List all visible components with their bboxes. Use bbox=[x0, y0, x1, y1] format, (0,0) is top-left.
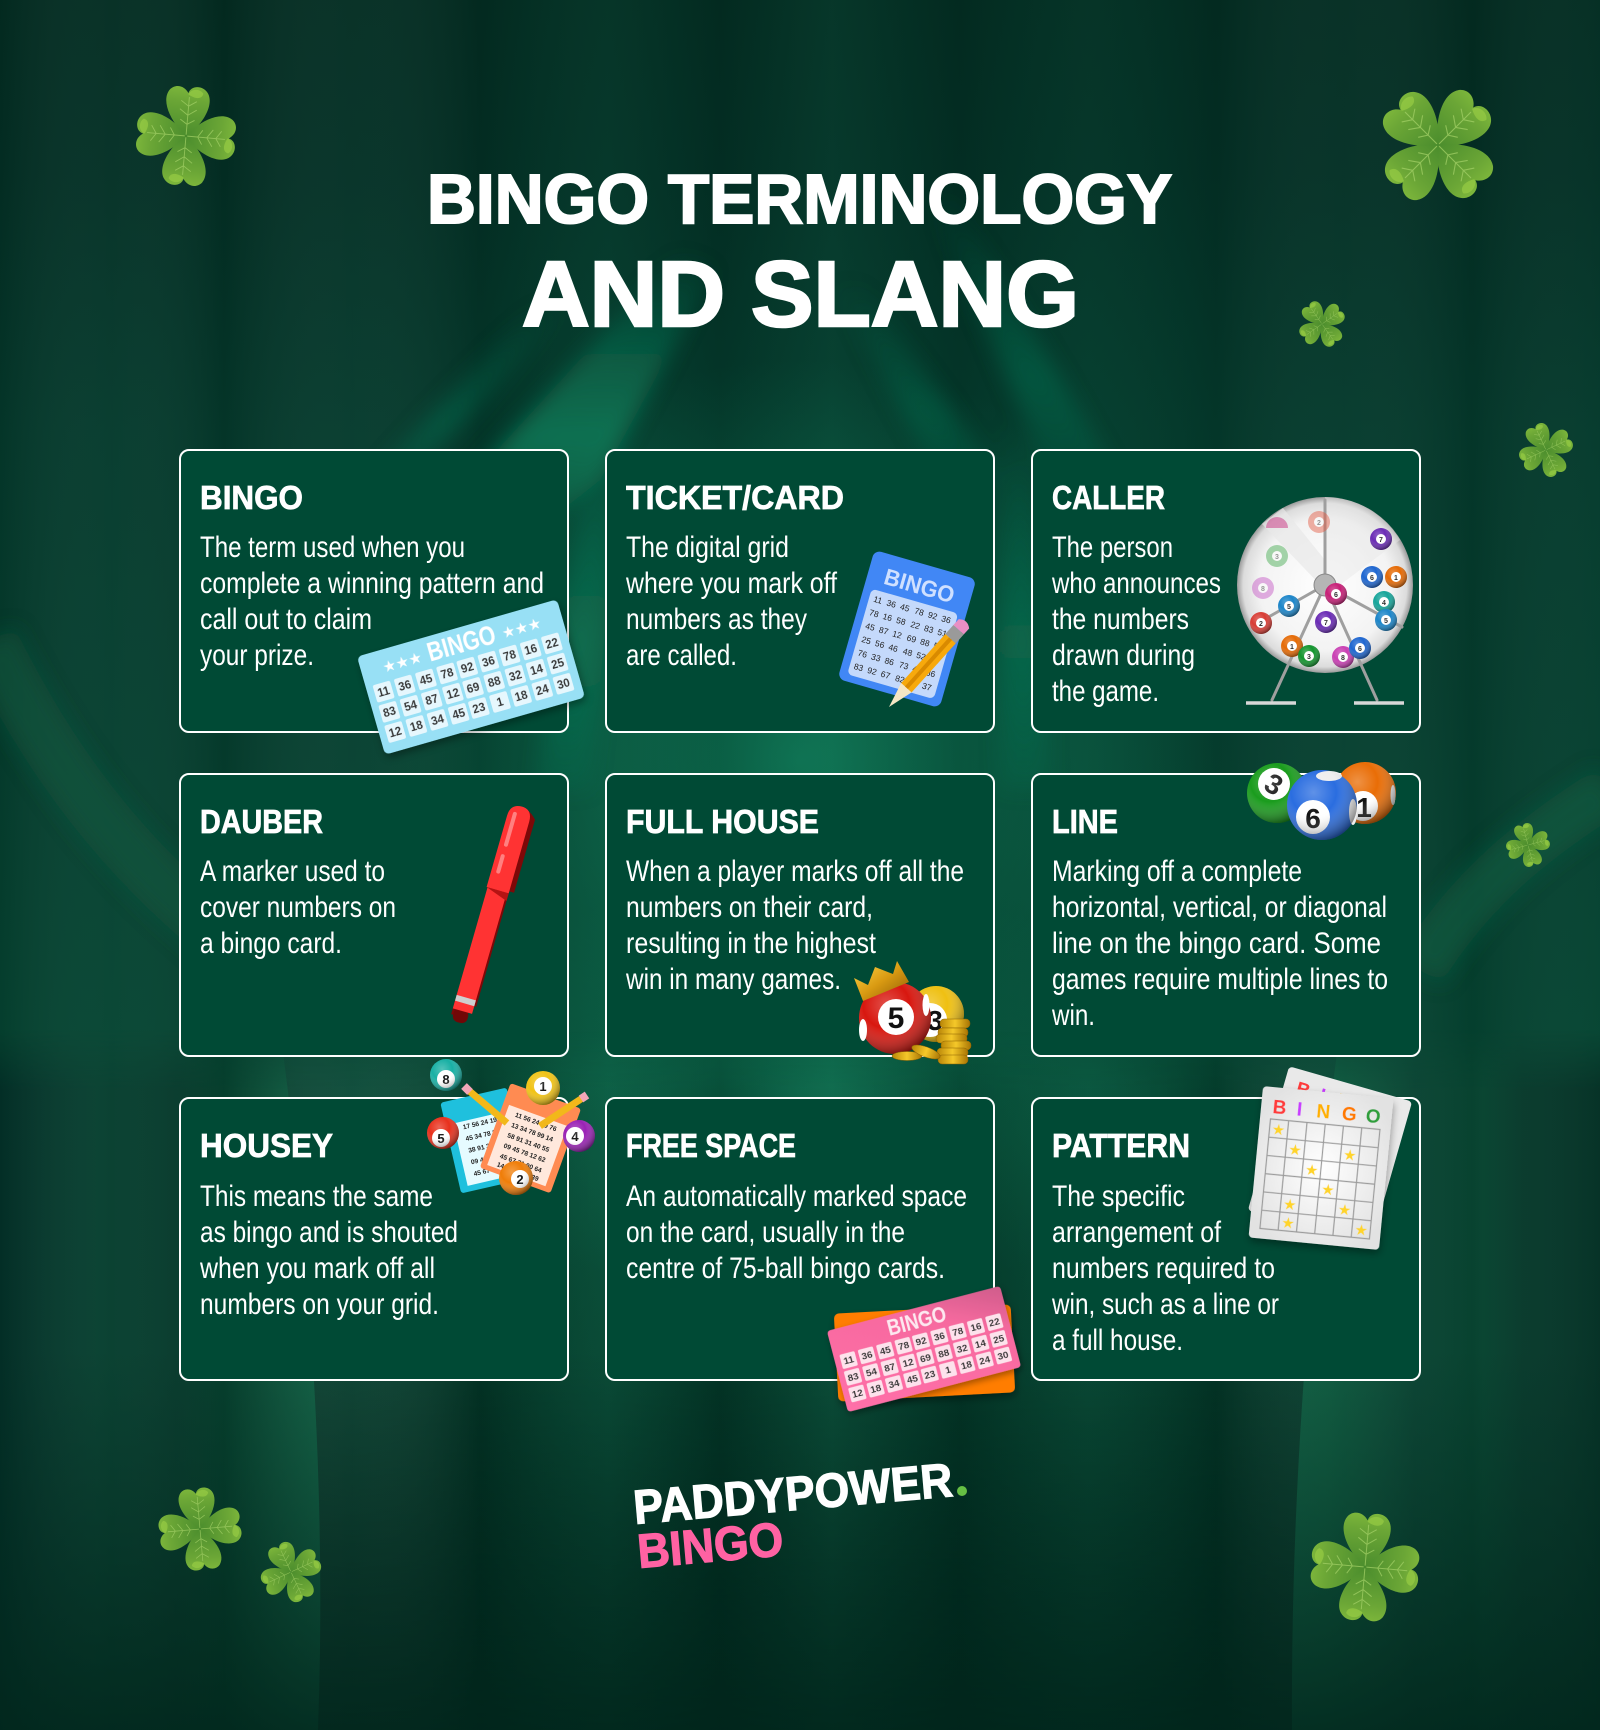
icon: cards, pencils and balls: 45 34 78 36 bbox=[465, 1128, 501, 1143]
icon: blue bingo ticket: 36 bbox=[481, 655, 497, 670]
text: pattern definition: arrangement of bbox=[1052, 1216, 1222, 1249]
icon: bingo ball cage: 7 bbox=[1324, 620, 1328, 627]
icon: pink and orange tickets bbox=[827, 1286, 1021, 1412]
text: line definition bbox=[1051, 855, 1388, 1032]
icon: bingo ball cage: 5 bbox=[1384, 618, 1388, 625]
icon: blue bingo ticket: 78 bbox=[440, 667, 456, 682]
icon: pink and orange tickets: 18 bbox=[869, 1383, 883, 1396]
icon: bingo pattern sheets: N bbox=[1315, 1101, 1331, 1124]
icon: blue bingo card with pencil: 11 bbox=[872, 594, 884, 606]
icon: bingo pattern sheets: ★ bbox=[1354, 1221, 1369, 1240]
icon: pink and orange tickets: 78 bbox=[897, 1340, 911, 1353]
icon: blue bingo card with pencil: 57 bbox=[933, 640, 945, 653]
icon: blue bingo card with pencil: BINGO bbox=[881, 563, 958, 608]
text: caller definition: The person bbox=[1052, 531, 1173, 564]
text: free space definition: centre of 75-ball bingo cards. bbox=[626, 1252, 945, 1285]
icon: blue bingo ticket: BINGO bbox=[424, 619, 499, 667]
icon: pink and orange tickets: 45 bbox=[879, 1345, 893, 1358]
icon: blue bingo card with pencil: 78 bbox=[913, 606, 925, 618]
icon: blue bingo card with pencil: 45 bbox=[864, 621, 876, 633]
text: caller definition bbox=[1051, 531, 1221, 708]
icon: blue bingo ticket: 87 bbox=[424, 693, 440, 708]
text: caller definition: drawn during bbox=[1052, 639, 1195, 672]
icon: bingo pattern sheets: ★ bbox=[1271, 1120, 1286, 1139]
icon: cards, pencils and balls bbox=[427, 1059, 595, 1195]
heading: housey: HOUSEY bbox=[200, 1127, 333, 1164]
text: pattern definition: The specific bbox=[1052, 1180, 1185, 1213]
icon: blue bingo ticket: 54 bbox=[403, 699, 419, 714]
icon: bingo pattern sheets: G bbox=[1341, 1104, 1358, 1126]
icon: blue bingo card with pencil: 73 bbox=[898, 659, 910, 672]
icon: cards, pencils and balls: 45 67 71 90 bbox=[473, 1163, 509, 1178]
icon: blue bingo card with pencil: 87 bbox=[878, 625, 890, 637]
icon: blue bingo card with pencil: 37 bbox=[921, 681, 933, 693]
text: bingo definition: your prize. bbox=[200, 639, 314, 672]
icon: crowned bingo balls and coins: 3 bbox=[927, 1005, 943, 1036]
icon: blue bingo card with pencil: 12 bbox=[891, 628, 903, 641]
heading: caller: CALLER bbox=[1052, 479, 1165, 516]
icon: blue bingo card with pencil: 36 bbox=[885, 598, 898, 610]
icon: bingo pattern sheets: B bbox=[1272, 1097, 1287, 1119]
icon: blue bingo ticket: 18 bbox=[514, 689, 530, 704]
icon: three bingo balls: 1 bbox=[1356, 792, 1372, 823]
icon: blue bingo ticket: 36 bbox=[397, 679, 413, 694]
icon: blue bingo ticket: 14 bbox=[529, 663, 545, 678]
text: full house definition: resulting in the highest bbox=[626, 927, 877, 960]
icon: crowned bingo balls and coins bbox=[854, 961, 971, 1064]
icon: blue bingo ticket: 78 bbox=[502, 649, 518, 664]
heading: line: LINE bbox=[1052, 803, 1118, 840]
icon: pink and orange tickets: BINGO bbox=[884, 1301, 949, 1341]
text: line definition: games require multiple lines to bbox=[1052, 963, 1388, 996]
icon: pink and orange tickets: 34 bbox=[888, 1378, 901, 1391]
icon: blue bingo ticket: 12 bbox=[388, 725, 403, 741]
text: line definition: Marking off a complete bbox=[1052, 855, 1302, 888]
clover small mid right bbox=[1501, 818, 1555, 872]
icon: pink and orange tickets: 12 bbox=[851, 1388, 864, 1401]
icon: blue bingo ticket: 45 bbox=[451, 707, 467, 722]
text: dauber definition bbox=[200, 855, 396, 960]
text: full house definition: numbers on their card, bbox=[626, 891, 873, 924]
icon: cards, pencils and balls: 38 91 31 40 bbox=[468, 1140, 504, 1155]
icon: bingo ball cage: 2 bbox=[1317, 520, 1321, 527]
text: housey definition bbox=[199, 1180, 458, 1321]
text: ticket definition bbox=[625, 531, 838, 672]
clover small upper right bbox=[1296, 298, 1348, 350]
icon: blue bingo card with pencil: 41 bbox=[911, 663, 923, 676]
icon: pink and orange tickets: 23 bbox=[923, 1369, 937, 1382]
text: caller definition: the game. bbox=[1052, 675, 1159, 708]
icon: pink and orange tickets: 83 bbox=[847, 1371, 861, 1384]
text: pattern definition: win, such as a line or bbox=[1051, 1288, 1279, 1321]
icon: bingo pattern sheets: ★ bbox=[1288, 1140, 1303, 1160]
icon: pink and orange tickets: 54 bbox=[865, 1366, 879, 1379]
icon: pink and orange tickets: 16 bbox=[970, 1321, 984, 1334]
text: dauber definition: a bingo card. bbox=[200, 927, 342, 960]
clover bottom left small bbox=[255, 1536, 327, 1608]
heading: pattern: PATTERN bbox=[1052, 1127, 1190, 1164]
icon: blue bingo ticket: 16 bbox=[523, 643, 539, 658]
icon: blue bingo card with pencil: 58 bbox=[895, 615, 907, 627]
icon: cards, pencils and balls: 2 bbox=[516, 1172, 524, 1187]
icon: blue bingo card with pencil: 16 bbox=[882, 611, 894, 623]
icon: cards, pencils and balls: 11 56 24 19 76 bbox=[514, 1112, 558, 1133]
icon: blue bingo card with pencil: 46 bbox=[887, 642, 899, 654]
icon: pink and orange tickets: 30 bbox=[997, 1350, 1010, 1363]
icon: three bingo balls bbox=[1247, 762, 1396, 840]
text: housey definition: when you mark off all bbox=[199, 1252, 435, 1285]
icon: blue bingo ticket: 69 bbox=[466, 681, 481, 696]
icon: blue bingo ticket: 83 bbox=[382, 705, 398, 720]
icon: bingo pattern sheets: ★ bbox=[1342, 1146, 1357, 1165]
clover top right bbox=[1383, 90, 1493, 200]
logo: Paddy Power Bingo: PADDYPOWER bbox=[631, 1454, 955, 1535]
icon: bingo ball cage: 1 bbox=[1290, 644, 1294, 651]
icon: cards, pencils and balls: 09 45 78 12 62 bbox=[502, 1143, 547, 1164]
icon: pink and orange tickets: 22 bbox=[988, 1316, 1001, 1330]
title: AND SLANG bbox=[522, 242, 1079, 346]
icon: pink and orange tickets: 36 bbox=[933, 1331, 947, 1344]
text: dauber definition: A marker used to bbox=[200, 855, 385, 888]
text: full house definition: When a player marks off all the bbox=[626, 855, 964, 888]
text: ticket definition: numbers as they bbox=[626, 603, 807, 636]
icon: cards, pencils and balls: 5 bbox=[437, 1131, 445, 1146]
icon: blue bingo ticket: 32 bbox=[508, 669, 523, 684]
icon: blue bingo ticket: 18 bbox=[409, 719, 425, 734]
heading: ticket/card: TICKET/CARD bbox=[626, 479, 844, 516]
icon: blue bingo card with pencil: 78 bbox=[868, 607, 880, 619]
icon: bingo ball cage: 6 bbox=[1358, 646, 1362, 653]
icon: pink and orange tickets: 14 bbox=[974, 1338, 988, 1351]
text: dauber definition: cover numbers on bbox=[200, 891, 396, 924]
text: line definition: line on the bingo card. Some bbox=[1052, 927, 1381, 960]
icon: pink and orange tickets: 45 bbox=[906, 1373, 920, 1387]
icon: pink and orange tickets: 78 bbox=[951, 1326, 965, 1339]
panel: line bbox=[1032, 762, 1420, 1056]
icon: blue bingo ticket: 11 bbox=[376, 685, 392, 700]
icon: blue bingo ticket: 1 bbox=[496, 696, 506, 710]
icon: blue bingo card with pencil: 92 bbox=[866, 665, 878, 677]
icon: blue bingo card with pencil: 83 bbox=[923, 623, 935, 635]
icon: pink and orange tickets: 12 bbox=[901, 1357, 915, 1370]
icon: bingo ball cage: 3 bbox=[1307, 654, 1311, 661]
icon: blue bingo card with pencil: 51 bbox=[936, 627, 948, 639]
icon: blue bingo card with pencil: 33 bbox=[929, 654, 941, 666]
icon: blue bingo card with pencil: 45 bbox=[899, 601, 911, 614]
panel: dauber bbox=[180, 774, 568, 1056]
icon: pink and orange tickets: 18 bbox=[960, 1359, 974, 1372]
icon: bingo ball cage: 4 bbox=[1382, 600, 1386, 607]
text: caller definition: the numbers bbox=[1052, 603, 1189, 636]
panel: ticket/card bbox=[606, 450, 994, 732]
text: ticket definition: are called. bbox=[626, 639, 737, 672]
text: line definition: win. bbox=[1051, 999, 1095, 1032]
icon: blue bingo card with pencil: 83 bbox=[853, 661, 865, 673]
icon: blue bingo card with pencil: 48 bbox=[902, 646, 914, 658]
panel: free space bbox=[606, 1098, 1021, 1412]
text: pattern definition: numbers required to bbox=[1052, 1252, 1275, 1285]
icon: cards, pencils and balls: 13 34 78 99 14 bbox=[510, 1122, 554, 1144]
panel: full house bbox=[606, 774, 994, 1064]
text: pattern definition: a full house. bbox=[1052, 1324, 1183, 1357]
icon: bingo pattern sheets: O bbox=[1365, 1106, 1381, 1128]
icon: red marker pen bbox=[449, 803, 537, 1027]
icon: bingo pattern sheets: ★ bbox=[1320, 1180, 1336, 1199]
text: free space definition: on the card, usually in the bbox=[626, 1216, 905, 1249]
icon: blue bingo ticket bbox=[357, 599, 585, 755]
icon: bingo pattern sheets: I bbox=[1317, 1085, 1328, 1107]
panel: bingo bbox=[180, 450, 585, 755]
icon: blue bingo card with pencil: 92 bbox=[927, 609, 939, 622]
icon: bingo ball cage: 6 bbox=[1334, 592, 1338, 599]
icon: cards, pencils and balls: 09 45 78 12 bbox=[470, 1152, 506, 1166]
title: BINGO TERMINOLOGY bbox=[427, 160, 1172, 238]
icon: blue bingo card with pencil: 33 bbox=[870, 651, 882, 664]
icon: cards, pencils and balls: 14 32 48 17 39 bbox=[496, 1161, 540, 1183]
icon: crowned bingo balls and coins: 5 bbox=[888, 1002, 904, 1035]
text: housey definition: This means the same bbox=[200, 1180, 433, 1213]
icon: bingo pattern sheets: ★ bbox=[1337, 1200, 1352, 1220]
clover bottom left large bbox=[146, 1475, 254, 1583]
icon: blue bingo card with pencil: 69 bbox=[906, 633, 918, 645]
icon: blue bingo ticket: ★★★ bbox=[500, 614, 543, 642]
icon: blue bingo ticket: ★★★ bbox=[380, 648, 424, 677]
clover small right bbox=[1514, 418, 1578, 482]
icon: pink and orange tickets: 69 bbox=[919, 1352, 933, 1365]
text: caller definition: who announces bbox=[1051, 567, 1221, 600]
icon: bingo ball cage: 8 bbox=[1341, 655, 1345, 662]
text: bingo definition: complete a winning pattern and bbox=[200, 567, 544, 600]
icon: three bingo balls: 3 bbox=[1259, 767, 1288, 802]
panel: caller bbox=[1032, 450, 1420, 732]
icon: cards, pencils and balls: 4 bbox=[571, 1129, 579, 1144]
text: ticket definition: The digital grid bbox=[626, 531, 789, 564]
icon: blue bingo ticket: 24 bbox=[535, 683, 551, 698]
text: ticket definition: where you mark off bbox=[625, 567, 838, 600]
icon: blue bingo card with pencil: 56 bbox=[874, 638, 886, 650]
icon: bingo pattern sheets: B bbox=[1294, 1079, 1312, 1103]
panel: housey bbox=[180, 1059, 595, 1380]
icon: pink and orange tickets: 32 bbox=[956, 1343, 969, 1356]
heading: full house: FULL HOUSE bbox=[626, 803, 819, 840]
icon: bingo pattern sheets: N bbox=[1334, 1090, 1353, 1114]
icon: blue bingo card with pencil: 22 bbox=[909, 619, 922, 631]
clover bottom right bbox=[1294, 1496, 1436, 1638]
text: free space definition: An automatically marked space bbox=[626, 1180, 967, 1213]
icon: blue bingo card with pencil: 76 bbox=[857, 648, 869, 660]
icon: blue bingo card with pencil bbox=[838, 550, 976, 712]
icon: blue bingo ticket: 92 bbox=[460, 661, 475, 676]
icon: blue bingo card with pencil: 86 bbox=[883, 655, 896, 668]
clover top left bbox=[121, 71, 251, 201]
icon: three bingo balls: 6 bbox=[1305, 803, 1321, 834]
icon: blue bingo ticket: 30 bbox=[556, 677, 572, 692]
text: bingo definition: call out to claim bbox=[200, 603, 372, 636]
icon: pink and orange tickets: 25 bbox=[992, 1333, 1006, 1346]
icon: blue bingo card with pencil: 25 bbox=[860, 634, 873, 646]
icon: blue bingo card with pencil: 52 bbox=[915, 650, 927, 662]
icon: bingo pattern sheets: ★ bbox=[1281, 1213, 1296, 1233]
text: free space definition bbox=[626, 1180, 967, 1285]
icon: blue bingo ticket: 45 bbox=[418, 673, 435, 688]
icon: blue bingo card with pencil: 82 bbox=[894, 673, 906, 685]
icon: blue bingo card with pencil: 67 bbox=[880, 669, 892, 681]
text: full house definition: win in many games. bbox=[625, 963, 841, 996]
icon: bingo ball cage bbox=[1237, 497, 1413, 703]
icon: bingo ball cage: 3 bbox=[1275, 554, 1279, 561]
heading: dauber: DAUBER bbox=[200, 803, 323, 840]
icon: cards, pencils and balls: 1 bbox=[539, 1079, 547, 1094]
icon: blue bingo ticket: 22 bbox=[544, 637, 560, 652]
title bbox=[427, 160, 1172, 346]
icon: bingo pattern sheets bbox=[1248, 1066, 1412, 1250]
icon: bingo ball cage: 6 bbox=[1370, 575, 1374, 582]
icon: cards, pencils and balls: 17 56 24 19 bbox=[462, 1117, 498, 1131]
icon: blue bingo card with pencil: 15 bbox=[907, 677, 920, 689]
icon: bingo pattern sheets: ★ bbox=[1282, 1195, 1297, 1214]
icon: bingo ball cage: 2 bbox=[1259, 621, 1263, 628]
logo: Paddy Power Bingo bbox=[631, 1454, 967, 1579]
text: pattern definition bbox=[1051, 1180, 1279, 1357]
logo: Paddy Power Bingo: BINGO bbox=[635, 1513, 785, 1579]
icon: blue bingo ticket: 23 bbox=[471, 701, 487, 717]
text: line definition: horizontal, vertical, or diagonal bbox=[1052, 891, 1387, 924]
text: bingo definition: The term used when you bbox=[200, 531, 465, 564]
icon: pink and orange tickets: 88 bbox=[937, 1347, 951, 1361]
heading: bingo: BINGO bbox=[200, 479, 303, 516]
icon: blue bingo card with pencil: 36 bbox=[940, 613, 952, 626]
icon: bingo ball cage: 8 bbox=[1261, 586, 1265, 593]
icon: pink and orange tickets: 92 bbox=[915, 1336, 928, 1349]
icon: blue bingo card with pencil: 36 bbox=[925, 667, 937, 679]
icon: blue bingo ticket: 12 bbox=[445, 687, 461, 702]
icon: pink and orange tickets: 87 bbox=[883, 1361, 897, 1375]
icon: cards, pencils and balls: 45 67 71 90 64 bbox=[499, 1153, 543, 1175]
icon: bingo ball cage: 5 bbox=[1287, 604, 1291, 611]
icon: blue bingo ticket: 88 bbox=[487, 675, 503, 690]
text: full house definition bbox=[625, 855, 964, 996]
icon: pink and orange tickets: 36 bbox=[861, 1349, 875, 1363]
icon: bingo ball cage: 7 bbox=[1379, 537, 1383, 544]
icon: cards, pencils and balls: 58 91 31 40 55 bbox=[506, 1132, 550, 1154]
icon: bingo pattern sheets: ★ bbox=[1304, 1161, 1319, 1180]
heading: free space: FREE SPACE bbox=[626, 1127, 796, 1164]
text: bingo definition bbox=[200, 531, 544, 672]
icon: blue bingo ticket: 25 bbox=[550, 657, 566, 672]
icon: blue bingo ticket: 34 bbox=[430, 713, 446, 728]
icon: bingo pattern sheets: I bbox=[1296, 1099, 1303, 1121]
icon: cards, pencils and balls: 8 bbox=[442, 1072, 450, 1087]
icon: pink and orange tickets: 24 bbox=[978, 1354, 992, 1368]
icon: pink and orange tickets: 11 bbox=[842, 1354, 856, 1367]
icon: bingo ball cage: 1 bbox=[1394, 575, 1398, 582]
icon: pink and orange tickets: 1 bbox=[944, 1365, 953, 1377]
icon: blue bingo card with pencil: 88 bbox=[919, 636, 931, 649]
text: housey definition: numbers on your grid. bbox=[200, 1288, 439, 1321]
text: housey definition: as bingo and is shouted bbox=[200, 1216, 458, 1249]
panel: pattern bbox=[1032, 1066, 1420, 1380]
